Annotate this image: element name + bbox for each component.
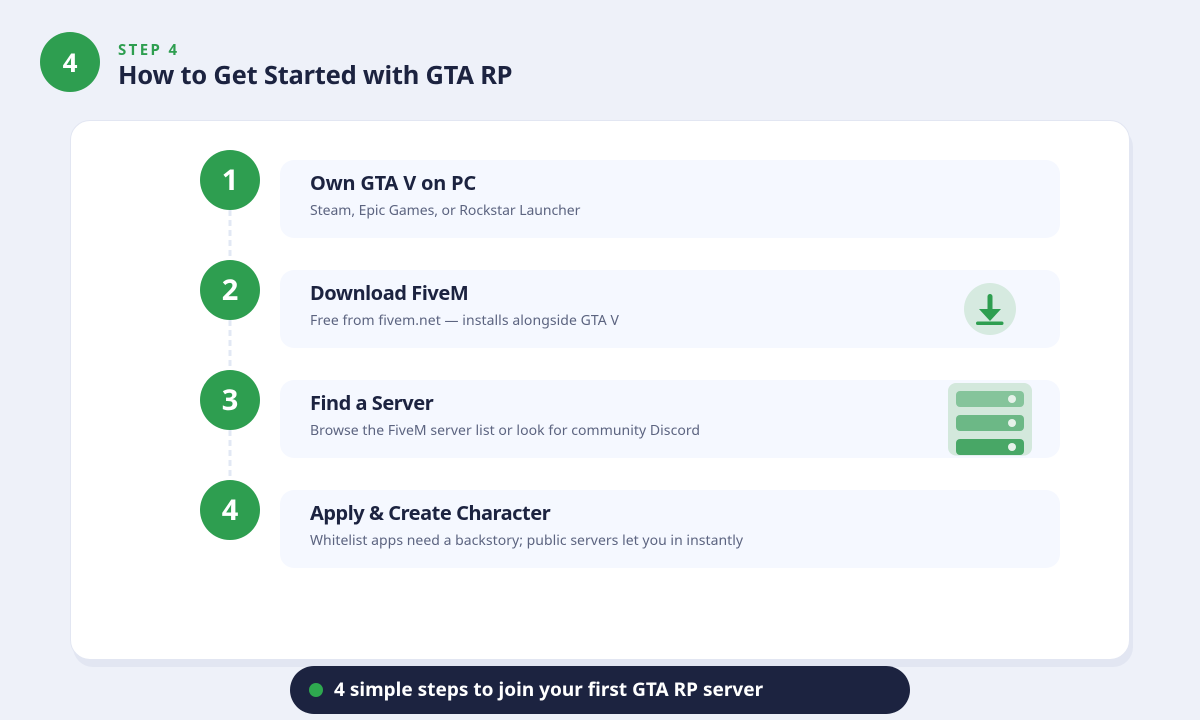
step 2 number: 2 [222,270,238,309]
step 1 title: Own GTA V on PC [310,169,476,196]
step 3 number [200,370,260,430]
step 1 card [280,160,1060,238]
header badge: 4 [63,44,77,80]
callout text: 4 simple steps to join your first GTA RP server [334,676,763,702]
step 2 title: Download FiveM [310,279,468,306]
step 1 number: 1 [222,160,238,199]
step 4 number: 4 [222,490,238,529]
step 1 number [200,150,260,210]
timeline connector [228,210,232,476]
step 4 number [200,480,260,540]
step 2 card [280,270,1060,348]
step 3 card [280,380,1060,458]
step 4 title: Apply & Create Character [310,499,550,526]
step 3 number: 3 [222,380,238,419]
step 3 description: Browse the FiveM server list or look for community Discord [310,421,700,440]
step 4 card [280,490,1060,568]
step 1 description: Steam, Epic Games, or Rockstar Launcher [310,201,580,220]
callout pill [290,666,910,714]
icon: server rack [948,383,1032,456]
title: How to Get Started with GTA RP [118,58,512,92]
step label: STEP 4 [118,40,180,60]
header badge [40,32,100,92]
step 2 description: Free from fivem.net — installs alongside GTA V [310,311,619,330]
callout dot [309,683,323,697]
panel: steps card [70,120,1130,660]
step 4 description: Whitelist apps need a backstory; public servers let you in instantly [310,531,743,550]
step 3 title: Find a Server [310,389,433,416]
icon: download [964,283,1016,335]
step 2 number [200,260,260,320]
